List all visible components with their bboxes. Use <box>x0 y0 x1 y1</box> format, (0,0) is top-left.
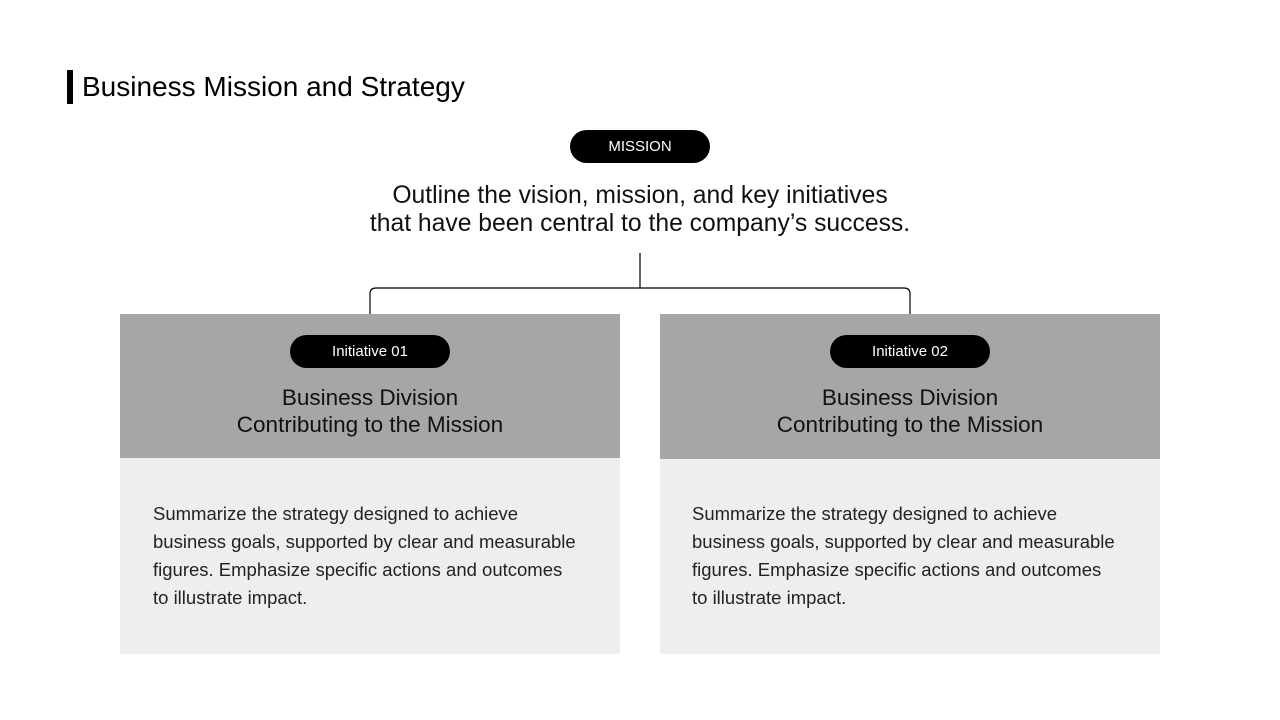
body text <box>692 503 1115 608</box>
mission statement: Outline the vision, mission, and key initiatives <box>392 182 888 209</box>
body text: figures. Emphasize specific actions and outcomes <box>692 559 1101 580</box>
pill: initiative 01: Initiative 01 <box>332 343 408 360</box>
heading <box>237 385 503 437</box>
heading: Business Division <box>822 385 998 410</box>
body text: to illustrate impact. <box>153 587 307 608</box>
body text: figures. Emphasize specific actions and outcomes <box>153 559 562 580</box>
pill: initiative 01 <box>290 335 450 368</box>
body text: Summarize the strategy designed to achieve <box>692 503 1057 524</box>
pill: initiative 02: Initiative 02 <box>872 343 948 360</box>
body text: business goals, supported by clear and measurable <box>692 531 1115 552</box>
connector <box>369 253 911 314</box>
pill: initiative 02 <box>830 335 990 368</box>
body text: Summarize the strategy designed to achieve <box>153 503 518 524</box>
title: Business Mission and Strategy <box>82 71 465 102</box>
panel: initiative 02 <box>660 314 1160 654</box>
heading: Business Division <box>282 385 458 410</box>
heading <box>777 385 1043 437</box>
mission pill: MISSION <box>608 138 672 155</box>
body text: business goals, supported by clear and measurable <box>153 531 576 552</box>
body text <box>153 503 576 608</box>
heading: Contributing to the Mission <box>777 412 1043 437</box>
heading: Contributing to the Mission <box>237 412 503 437</box>
mission statement <box>370 182 910 237</box>
body text: to illustrate impact. <box>692 587 846 608</box>
mission pill <box>570 130 710 163</box>
panel: initiative 01 <box>120 314 620 654</box>
mission statement: that have been central to the company’s success. <box>370 210 910 237</box>
